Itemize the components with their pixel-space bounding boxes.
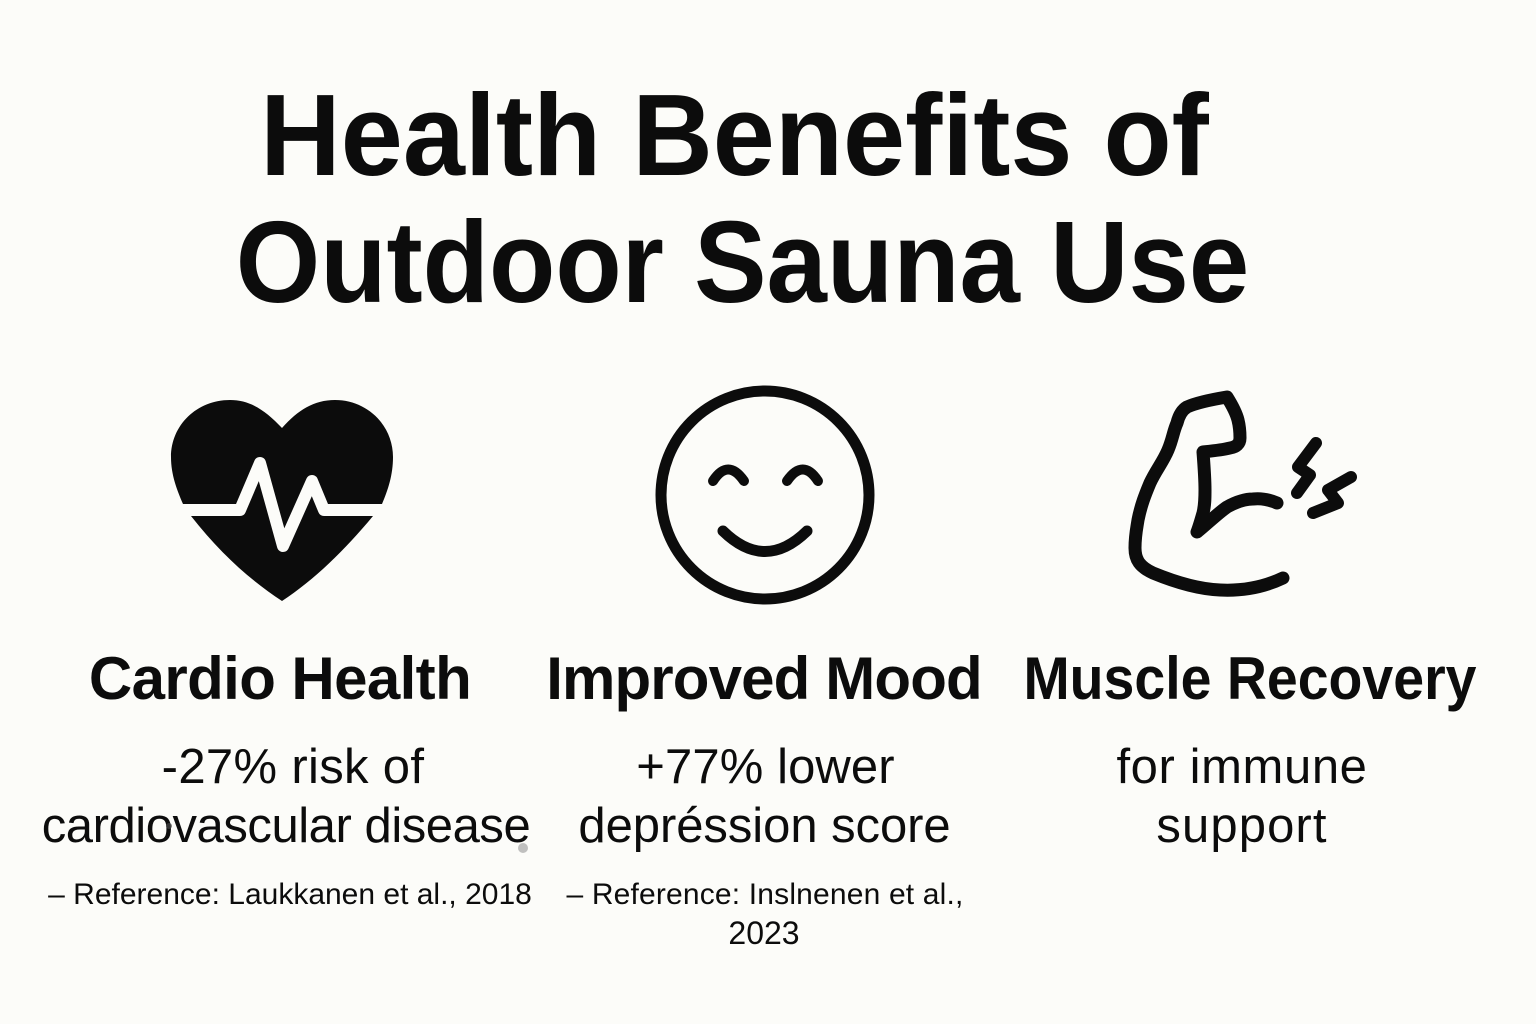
- title: Health Benefits of: [260, 70, 1209, 200]
- icon: smiley face: [656, 386, 874, 604]
- icon: heart with pulse: [170, 400, 393, 601]
- reference: cardio: – Reference: Laukkanen et al., 2018: [48, 878, 532, 911]
- text: mood statistic: [578, 740, 951, 853]
- reference: mood: 2023: [728, 915, 800, 951]
- reference: mood: [566, 878, 964, 951]
- icon: flexed arm with sparks: [1128, 390, 1357, 597]
- text: mood statistic: depréssion score: [578, 799, 951, 853]
- text: mood statistic: +77% lower: [636, 740, 895, 794]
- text: muscle benefit: for immune: [1116, 740, 1368, 794]
- text: muscle benefit: [1116, 740, 1368, 853]
- title: [236, 70, 1249, 327]
- text: cardio statistic: -27% risk of: [162, 740, 424, 794]
- heading: cardio health: Cardio Health: [89, 645, 471, 712]
- title: Outdoor Sauna Use: [236, 197, 1249, 327]
- text: cardio statistic: [42, 740, 530, 853]
- reference: mood: – Reference: Inslnenen et al.,: [566, 878, 964, 911]
- text: muscle benefit: support: [1156, 799, 1328, 853]
- text: cardio statistic: cardiovascular disease: [42, 799, 530, 853]
- heading: improved mood: Improved Mood: [546, 645, 982, 712]
- heading: muscle recovery: Muscle Recovery: [1023, 645, 1476, 712]
